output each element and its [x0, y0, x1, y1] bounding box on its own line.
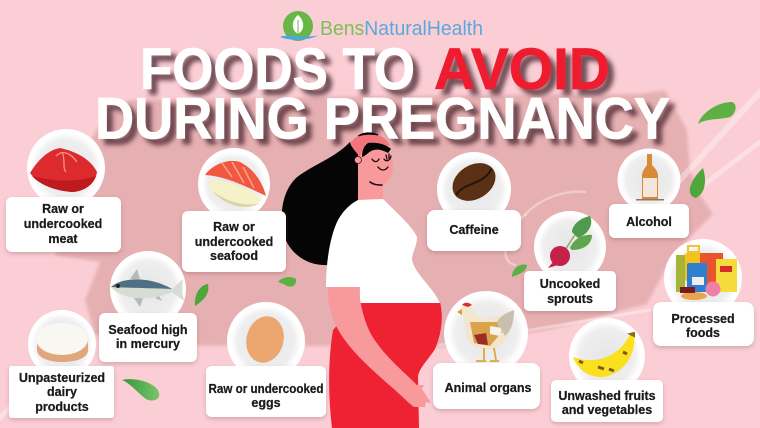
leaf [690, 168, 705, 198]
logo icon [280, 11, 319, 41]
label: Raw or [213, 220, 255, 234]
ear [354, 156, 362, 164]
leaf [698, 102, 736, 124]
label: Unwashed fruits [558, 389, 656, 403]
leaves [122, 102, 736, 401]
hair [282, 142, 362, 265]
label: and vegetables [562, 403, 652, 417]
label: eggs [251, 396, 281, 410]
leaf [195, 284, 208, 306]
brush stroke backdrop [55, 90, 713, 347]
item: uncooked sprouts [524, 211, 616, 311]
neck and face [358, 145, 393, 202]
card [99, 313, 197, 362]
label: Uncooked [540, 277, 600, 291]
label: Processed [671, 312, 735, 326]
icon: bottle [636, 154, 664, 200]
card [653, 302, 754, 346]
icon: egg [241, 312, 289, 367]
label: Animal organs [445, 381, 531, 395]
circle [569, 318, 645, 394]
item: unwashed fruits and vegetables [551, 318, 663, 422]
icon: coffee bean [445, 155, 503, 209]
item: processed foods [653, 239, 754, 346]
icon: chicken [457, 303, 514, 361]
face details [370, 154, 391, 185]
circle [27, 129, 105, 207]
card [433, 363, 540, 409]
arm and hand [328, 287, 431, 407]
item: animal organs [433, 291, 540, 409]
item: raw eggs [206, 302, 326, 417]
item: raw seafood [182, 148, 286, 272]
icon: radish [548, 216, 592, 268]
circle [618, 148, 680, 212]
card [182, 211, 286, 272]
circle [28, 310, 96, 378]
circle [227, 302, 305, 380]
card [551, 380, 663, 422]
circle [437, 152, 511, 226]
label: Unpasteurized [19, 371, 105, 385]
title: DURING PREGNANCY [95, 86, 670, 152]
circle [534, 211, 606, 283]
label: dairy [47, 385, 77, 399]
label: Seafood high [108, 323, 188, 337]
pregnant woman [282, 133, 442, 428]
leaf [278, 277, 296, 287]
card [6, 197, 121, 252]
hair top [358, 133, 378, 136]
item: seafood high in mercury [99, 251, 197, 362]
label: Raw or undercooked [208, 382, 324, 396]
label: seafood [210, 249, 258, 263]
logo [280, 11, 483, 41]
white brush strokes [0, 92, 760, 418]
circle [664, 239, 742, 317]
card [427, 210, 521, 251]
item: unpasteurized dairy [9, 310, 114, 418]
label: undercooked [195, 235, 273, 249]
card [206, 366, 326, 417]
logo text: BensNaturalHealth [320, 17, 483, 40]
title [95, 37, 670, 152]
icon: meat [30, 148, 97, 192]
title: FOODS TO [140, 37, 415, 102]
label: sprouts [547, 292, 593, 306]
leaf [122, 379, 159, 401]
card [609, 204, 689, 238]
headband [350, 134, 390, 157]
shirt [326, 199, 440, 303]
label: foods [686, 326, 720, 340]
leaf [512, 265, 527, 277]
label: Caffeine [449, 223, 499, 237]
circle [444, 291, 528, 375]
skirt [329, 302, 442, 428]
label: Alcohol [626, 215, 672, 229]
circle [110, 251, 186, 327]
fringe [362, 143, 391, 157]
icon: packaged foods [676, 246, 737, 300]
icon: fish [111, 269, 184, 307]
icon: banana [573, 333, 634, 377]
circle [198, 148, 270, 220]
label: products [35, 400, 89, 414]
label: in mercury [116, 337, 180, 351]
card [9, 366, 114, 418]
item: alcohol [609, 148, 689, 238]
title: AVOID [434, 37, 610, 102]
item: caffeine [427, 152, 521, 251]
label: Raw or [42, 202, 84, 216]
card [524, 271, 616, 311]
icon: sushi [205, 161, 266, 207]
icon: cheese [36, 323, 88, 362]
label: undercooked [24, 217, 102, 231]
label: meat [48, 232, 78, 246]
item: raw meat [6, 129, 121, 252]
